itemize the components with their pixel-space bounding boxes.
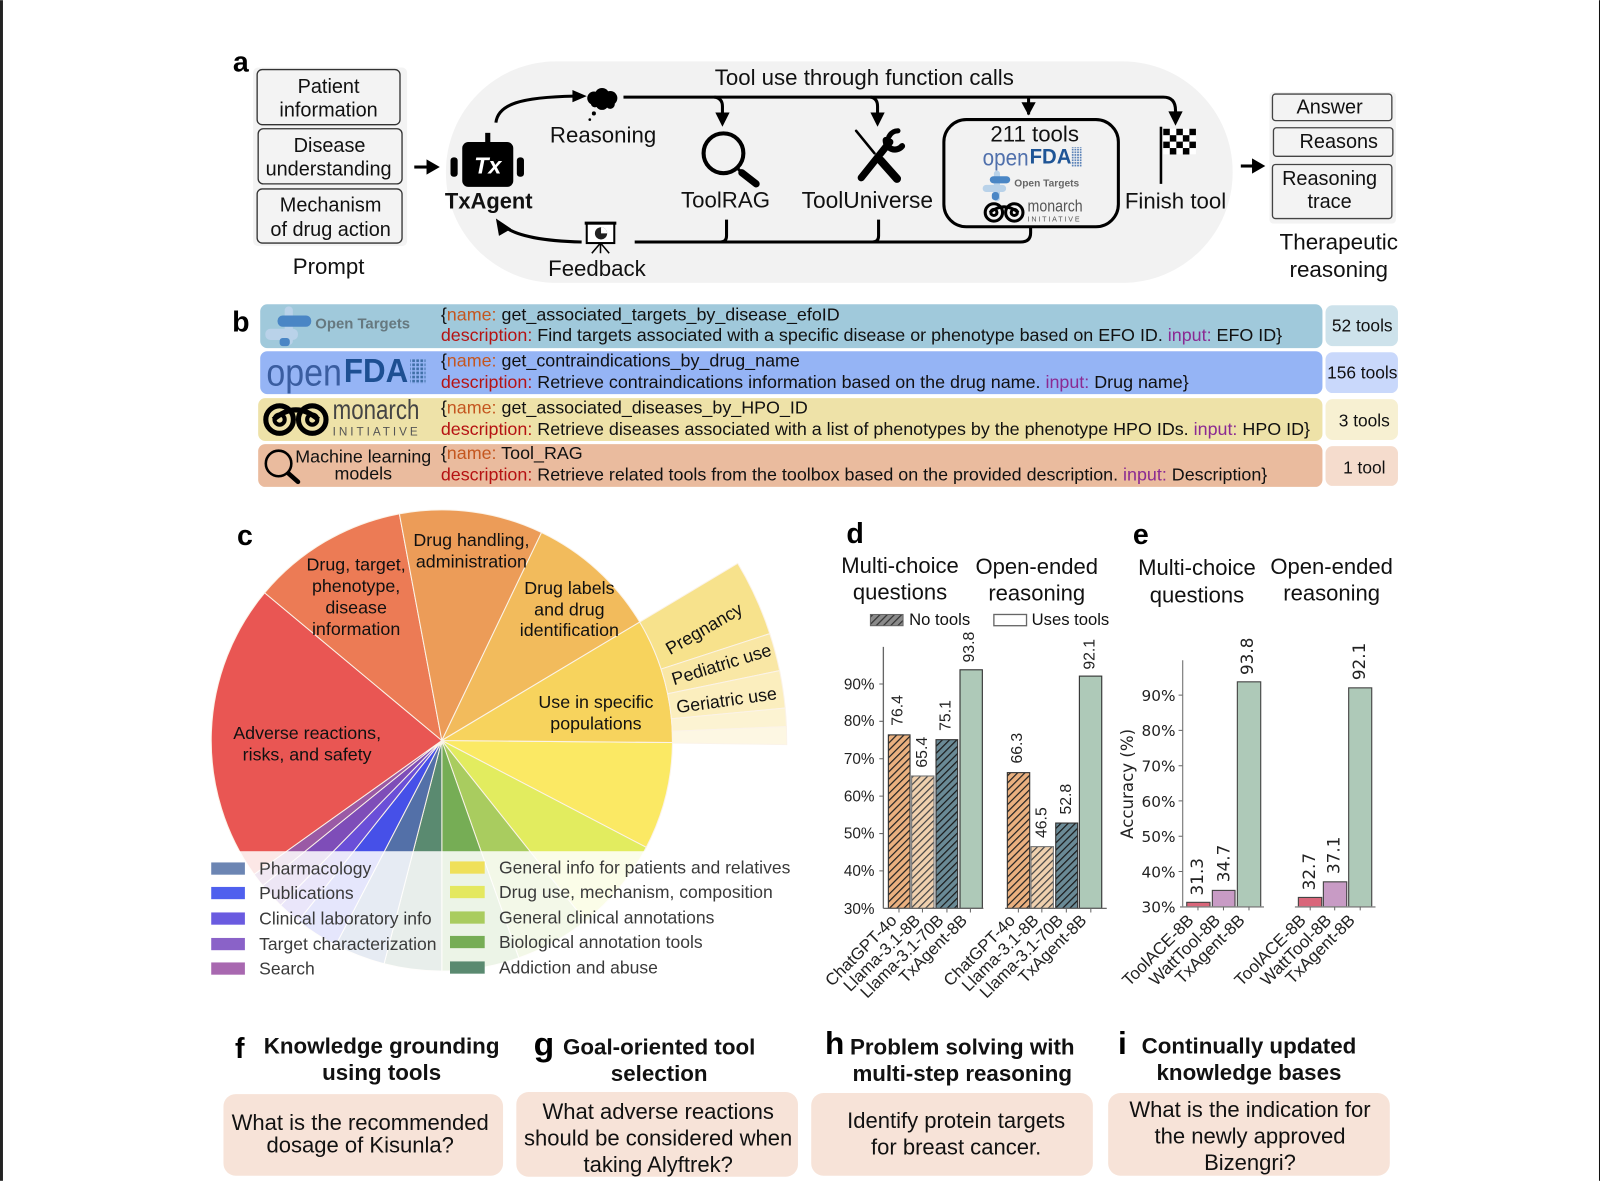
bar chart: d multi-choice and open-ended: 75.1 (937, 700, 954, 731)
bar chart: e multi-choice and open-ended: WattTool-8B (1145, 911, 1224, 989)
panel label e: e (1133, 519, 1149, 551)
row: Open Targets: Open Targets (315, 317, 410, 333)
arrow: agent to reasoning (496, 90, 587, 123)
slice labels: information (312, 619, 400, 639)
row: Machine learning models: models (334, 464, 392, 484)
row: Monarch: {name: get_associated_diseases_by_HPO_ID (441, 397, 808, 418)
prompt group: Prompt (293, 254, 365, 279)
agent loop background (446, 61, 1233, 283)
prompt group: Disease (294, 135, 365, 157)
feedback label: Feedback (548, 256, 647, 281)
row: Monarch: monarch (333, 394, 419, 425)
reasoning label: Reasoning (550, 122, 656, 147)
arrow: prompt to agent (414, 159, 440, 175)
therapeutic reasoning output (1269, 92, 1398, 282)
bar chart: d multi-choice and open-ended: 90% (844, 676, 875, 693)
slice labels: populations (550, 714, 642, 734)
bar chart: e multi-choice and open-ended: 70% (1142, 758, 1176, 776)
arrow: feedback bus (496, 219, 1031, 242)
icon: feedback board (585, 222, 616, 253)
icon: ToolRAG magnifier (704, 133, 756, 184)
panel i: updated knowledge bases: Continually updated (1142, 1034, 1356, 1059)
panel g: goal-oriented tool selection: g (534, 1027, 554, 1064)
legend: Pharmacology (259, 859, 371, 879)
TxAgent label: TxAgent (445, 189, 533, 214)
legend veil (200, 851, 802, 979)
bar chart: d multi-choice and open-ended: ChatGPT-4o (940, 911, 1019, 990)
therapeutic reasoning output: trace (1307, 191, 1352, 213)
211 tools box: 211 tools (990, 121, 1079, 146)
panel d: accuracy comparison with general models (821, 518, 1109, 1002)
row: Monarch: description: Retrieve diseases associated with a list of phenotypes by the phenotype HPO IDs. input: HPO ID} (441, 419, 1310, 439)
row: openFDA (260, 350, 1398, 394)
slice labels: identification (520, 620, 619, 640)
finish tool label: Finish tool (1125, 189, 1226, 214)
row: Machine learning models: Machine learning (295, 446, 431, 466)
ToolUniverse label: ToolUniverse (802, 187, 933, 213)
bar chart: d multi-choice and open-ended: 50% (844, 825, 875, 842)
legend: Publications (259, 883, 354, 903)
bar chart: e multi-choice and open-ended: 60% (1142, 793, 1176, 811)
therapeutic reasoning output: reasoning (1289, 257, 1388, 282)
bar chart: d multi-choice and open-ended: 76.4 (889, 695, 906, 726)
slice labels: risks, and safety (243, 744, 372, 764)
bar chart: e multi-choice and open-ended: 90% (1142, 687, 1176, 705)
panel g: goal-oriented tool selection: taking Alyftrek? (583, 1152, 733, 1177)
panel g: goal-oriented tool selection (516, 1027, 798, 1177)
chart titles: Multi-choice (1138, 555, 1256, 580)
bar chart: e multi-choice and open-ended (1118, 638, 1376, 990)
panel f: knowledge grounding (223, 1033, 503, 1176)
slice labels: and drug (534, 599, 605, 619)
slice labels: Pediatric use (669, 640, 774, 689)
row: openFDA: open (266, 352, 342, 394)
legend: General info for patients and relatives (499, 858, 791, 878)
bar chart: d multi-choice and open-ended: 60% (844, 789, 875, 806)
panel b: tool descriptions (232, 304, 1398, 487)
legend: Addiction and abuse (499, 958, 658, 978)
bar chart: d multi-choice and open-ended: Llama-3.1-70B (976, 911, 1067, 1002)
bar chart: e multi-choice and open-ended: WattTool-8B (1257, 911, 1335, 989)
slice labels: Adverse reactions, (233, 723, 381, 743)
loop title: Tool use through function calls (715, 65, 1014, 90)
row: Monarch: 3 tools (1339, 411, 1390, 431)
panel i: updated knowledge bases: the newly approved (1154, 1123, 1346, 1148)
slice labels: Geriatric use (675, 683, 778, 717)
slice labels: Drug handling, (413, 530, 529, 550)
panel f: knowledge grounding: using tools (322, 1060, 441, 1085)
legend: Target characterization (259, 934, 437, 954)
chart titles: Open-ended (975, 554, 1098, 579)
ToolRAG label: ToolRAG (681, 188, 770, 213)
bar chart: d multi-choice and open-ended: ChatGPT-4o (821, 911, 901, 990)
bar chart: d multi-choice and open-ended: 30% (844, 901, 875, 918)
row: openFDA: description: Retrieve contraindications information based on the drug name. input: Drug name} (441, 372, 1189, 392)
211 tools box: monarch (1028, 197, 1083, 215)
211 tools box: Open Targets (1014, 178, 1080, 189)
panel f: knowledge grounding: f (235, 1033, 245, 1065)
row: Open Targets (260, 304, 1398, 348)
bar chart: d multi-choice and open-ended: 40% (844, 863, 875, 880)
row: Machine learning models: {name: Tool_RAG (441, 443, 583, 464)
bar chart: d multi-choice and open-ended: 66.3 (1009, 733, 1026, 764)
pie slices (211, 510, 672, 971)
bar chart: d multi-choice and open-ended: 92.1 (1081, 639, 1098, 670)
panel label a: a (233, 46, 250, 78)
panel g: goal-oriented tool selection: What adverse reactions (542, 1099, 774, 1124)
prompt group: of drug action (270, 219, 391, 241)
row: Machine learning models: description: Retrieve related tools from the toolbox based on the provided description. input: Description} (441, 465, 1267, 485)
bar chart: e multi-choice and open-ended: 93.8 (1237, 638, 1257, 675)
bar chart: e multi-choice and open-ended: 37.1 (1324, 837, 1344, 874)
bar chart: e multi-choice and open-ended: 50% (1142, 828, 1176, 846)
slice labels (233, 530, 778, 764)
bar chart: d multi-choice and open-ended: 46.5 (1033, 807, 1050, 838)
bar chart: d multi-choice and open-ended: 80% (844, 713, 875, 730)
bar chart: e multi-choice and open-ended: 34.7 (1213, 845, 1233, 882)
slice labels: Drug labels (524, 578, 615, 598)
bar chart: e multi-choice and open-ended: ToolACE-8B (1231, 911, 1310, 990)
bar chart: e multi-choice and open-ended: Accuracy (%) (1118, 729, 1137, 839)
bar chart: d multi-choice and open-ended: 93.8 (961, 632, 978, 663)
panel h: multi-step reasoning: h (825, 1025, 844, 1061)
bar chart: d multi-choice and open-ended: Llama-3.1-8B (958, 911, 1042, 995)
bar chart: e multi-choice and open-ended: 32.7 (1299, 853, 1319, 890)
hatch legend: Uses tools (1032, 610, 1109, 629)
panel h: multi-step reasoning: multi-step reasoning (852, 1061, 1072, 1086)
arrow: agent to output (1241, 158, 1265, 174)
legend: Drug use, mechanism, composition (499, 882, 773, 902)
legend: Clinical laboratory info (259, 909, 432, 929)
bar chart: e multi-choice and open-ended: 31.3 (1187, 858, 1207, 895)
therapeutic reasoning output: Therapeutic (1280, 230, 1398, 255)
panel h: multi-step reasoning: Identify protein targets (847, 1108, 1065, 1133)
211 tools box: INITIATIVE (1028, 216, 1081, 224)
bar chart: e multi-choice and open-ended: TxAgent-8B (1282, 911, 1359, 988)
icon: ToolUniverse tools (856, 131, 902, 179)
prompt group: Patient (298, 76, 360, 98)
panel i: updated knowledge bases: knowledge bases (1157, 1060, 1341, 1085)
icon: finish flag (1160, 127, 1196, 184)
bar chart: e multi-choice and open-ended: 40% (1142, 864, 1176, 882)
hatch legend: No tools (909, 610, 970, 629)
icon: reasoning cloud (587, 88, 617, 121)
therapeutic reasoning output: Answer (1296, 96, 1363, 118)
row: openFDA: 156 tools (1327, 363, 1398, 383)
legend (211, 858, 791, 979)
bar chart: d multi-choice and open-ended: Llama-3.1-70B (857, 911, 948, 1002)
legend: Biological annotation tools (499, 932, 703, 952)
chart titles (841, 553, 1098, 606)
prompt group: Mechanism (280, 194, 381, 216)
panel h: multi-step reasoning: Problem solving with (850, 1035, 1075, 1060)
slice labels: phenotype, (312, 576, 400, 596)
panel g: goal-oriented tool selection: Goal-oriented tool (563, 1035, 755, 1060)
bar chart: d multi-choice and open-ended: 70% (844, 751, 875, 768)
chart titles: Multi-choice (841, 553, 959, 578)
therapeutic reasoning output: Reasons (1300, 131, 1378, 153)
panel f: knowledge grounding: What is the recommended (232, 1110, 489, 1135)
row: Monarch: INITIATIVE (333, 425, 421, 438)
panel i: updated knowledge bases: i (1118, 1025, 1127, 1061)
panel f: knowledge grounding: Knowledge grounding (264, 1034, 499, 1059)
panel e: accuracy comparison with tool models (1118, 519, 1393, 990)
icon: TxAgent robot (451, 133, 524, 187)
bar chart: e multi-choice and open-ended: 92.1 (1349, 643, 1369, 680)
row: Monarch (258, 394, 1398, 441)
panel h: multi-step reasoning (811, 1025, 1093, 1176)
slice labels: Drug, target, (307, 554, 406, 574)
chart titles: questions (1150, 583, 1244, 608)
slice labels: Use in specific (538, 692, 654, 712)
panel g: goal-oriented tool selection: should be considered when (524, 1125, 792, 1150)
bar chart: d multi-choice and open-ended: 65.4 (914, 737, 931, 768)
row: openFDA: {name: get_contraindications_by_drug_name (441, 350, 800, 371)
arrow: tool call bus (623, 97, 1183, 127)
211 tools box: FDA (1030, 144, 1071, 168)
211 tools box (944, 120, 1118, 227)
bar chart: d multi-choice and open-ended: TxAgent-8B (1015, 911, 1090, 987)
bar chart: e multi-choice and open-ended: TxAgent-8B (1172, 911, 1249, 988)
legend: Search (259, 959, 315, 979)
bar chart: d multi-choice and open-ended: TxAgent-8B (895, 911, 971, 987)
prompt group (253, 68, 407, 279)
slice labels: administration (416, 551, 527, 571)
row: Machine learning models: 1 tool (1343, 458, 1385, 478)
panel h: multi-step reasoning: for breast cancer. (871, 1135, 1041, 1160)
therapeutic reasoning output: Reasoning (1282, 168, 1377, 190)
prompt group: understanding (266, 159, 392, 181)
slice labels: disease (325, 597, 387, 617)
row: Open Targets: 52 tools (1332, 316, 1393, 336)
row: openFDA: FDA (344, 353, 408, 390)
bar chart: d multi-choice and open-ended (821, 632, 1107, 1002)
panel i: updated knowledge bases: What is the indication for (1129, 1097, 1371, 1122)
panel i: updated knowledge bases: Bizengri? (1204, 1150, 1296, 1175)
panel a: agent workflow (233, 46, 1398, 283)
slice labels: Pregnancy (662, 599, 746, 659)
row: Open Targets: description: Find targets associated with a specific disease or phenotype based on EFO ID. input: EFO ID} (441, 325, 1282, 345)
panel label d: d (846, 518, 864, 550)
chart titles: Open-ended (1270, 554, 1393, 579)
bar chart: e multi-choice and open-ended: 80% (1142, 722, 1176, 740)
bar chart: e multi-choice and open-ended: ToolACE-8B (1119, 911, 1198, 990)
icon: TxAgent robot: Tx (474, 153, 502, 179)
bar chart: d multi-choice and open-ended: Llama-3.1-8B (840, 911, 924, 995)
panel c: tool category pie chart (200, 510, 802, 979)
exploded population slices (640, 563, 787, 745)
chart titles (1138, 554, 1393, 608)
prompt group: information (279, 99, 378, 121)
211 tools box: open (983, 144, 1029, 170)
panel label c: c (237, 520, 253, 552)
legend: General clinical annotations (499, 908, 715, 928)
chart titles: reasoning (1283, 581, 1380, 606)
chart titles: questions (853, 580, 947, 605)
hatch legend (870, 610, 1109, 629)
panel g: goal-oriented tool selection: selection (611, 1061, 708, 1086)
bar chart: e multi-choice and open-ended: 30% (1142, 898, 1176, 916)
panel i: updated knowledge bases (1108, 1025, 1390, 1176)
row: Machine learning models (258, 443, 1398, 487)
row: Open Targets: {name: get_associated_targets_by_disease_efoID (441, 304, 840, 325)
bar chart: d multi-choice and open-ended: 52.8 (1058, 784, 1075, 815)
chart titles: reasoning (988, 581, 1085, 606)
panel label b: b (232, 307, 250, 339)
panel f: knowledge grounding: dosage of Kisunla? (267, 1133, 454, 1158)
